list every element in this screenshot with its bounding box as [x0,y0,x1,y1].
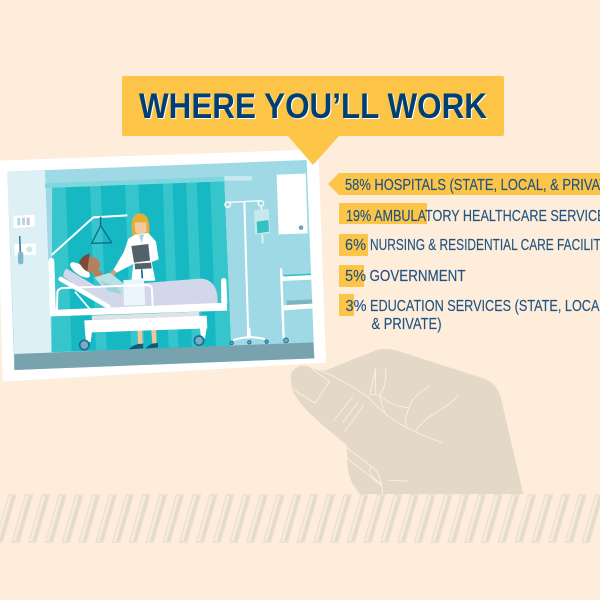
decorative striped ground band [0,494,600,543]
icon: hand holding the photo [291,349,523,494]
IV pole and bag [225,201,270,345]
row: education 3% [339,294,600,333]
row: nursing 6%: 6% [345,237,366,254]
curtain [45,176,253,352]
photo: hospital room [0,149,326,382]
row: government 5%: GOVERNMENT [370,268,466,285]
list: work settings by percentage [328,173,600,333]
room back wall [7,160,314,370]
row: government 5%: 5% [345,268,366,285]
bed with patient [48,215,227,350]
title banner: WHERE YOU’LL WORK [139,87,487,126]
row: nursing 6% [339,234,600,256]
wall cabinet [277,174,308,234]
row: government 5% [339,265,466,287]
row: education 3%: & PRIVATE) [372,316,442,333]
left wall panel [7,170,52,355]
photo white border [0,149,326,382]
title banner: WHERE YOU’LL WORK [140,88,488,127]
row: education 3%: 3% [346,298,367,315]
doctor [111,213,159,349]
floor [14,342,314,370]
side cart [281,268,313,343]
title banner [122,76,504,165]
